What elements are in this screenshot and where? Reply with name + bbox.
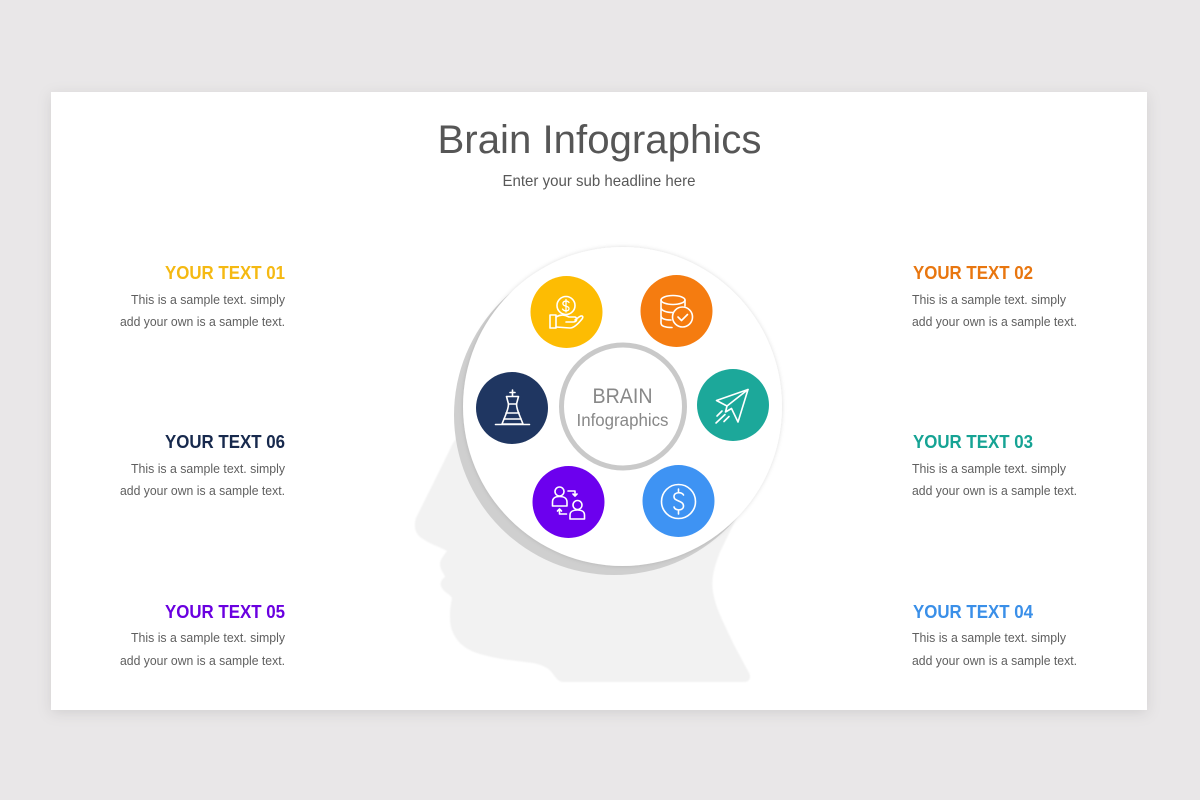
centre label: BRAIN [592, 385, 652, 408]
text block 01: This is a sample text. simply [131, 293, 286, 307]
text block 06 [120, 432, 286, 498]
icon: dollar coin (blue) [642, 465, 714, 537]
icon: paper plane (teal) [697, 369, 769, 441]
text block 06: YOUR TEXT 06 [165, 432, 285, 452]
text block 01 [120, 263, 286, 329]
text block 03: add your own is a sample text. [912, 484, 1077, 498]
centre label: Infographics [576, 410, 669, 430]
text block 05: YOUR TEXT 05 [165, 602, 285, 622]
icon: hand with coin (yellow) [530, 276, 602, 348]
text block 04: This is a sample text. simply [912, 631, 1067, 645]
icon: people exchange (purple) [532, 466, 604, 538]
icon: database check (orange) [640, 275, 712, 347]
text block 05: This is a sample text. simply [131, 631, 286, 645]
head silhouette [415, 420, 750, 682]
text block 05: add your own is a sample text. [120, 654, 285, 668]
grey back disc [454, 255, 774, 575]
text block 03 [912, 432, 1077, 498]
text block 01: add your own is a sample text. [120, 315, 285, 329]
white disc [463, 247, 782, 566]
text block 06: add your own is a sample text. [120, 484, 285, 498]
text block 04 [912, 602, 1077, 668]
text block 04: YOUR TEXT 04 [913, 602, 1033, 622]
text block 03: This is a sample text. simply [912, 462, 1067, 476]
text block 02: add your own is a sample text. [912, 315, 1077, 329]
text block 06: This is a sample text. simply [131, 462, 286, 476]
text block 02: This is a sample text. simply [912, 293, 1067, 307]
text block 03: YOUR TEXT 03 [913, 432, 1033, 452]
text block 02: YOUR TEXT 02 [913, 263, 1033, 283]
text block 02 [912, 263, 1077, 329]
title: Brain Infographics [438, 118, 762, 162]
text block 01: YOUR TEXT 01 [165, 263, 285, 283]
text block 05 [120, 602, 286, 668]
centre label [576, 385, 669, 430]
icon: chess king (navy) [476, 372, 548, 444]
subtitle: Enter your sub headline here [502, 173, 696, 190]
panel: white slide [51, 92, 1147, 710]
centre ring [562, 345, 684, 468]
text block 04: add your own is a sample text. [912, 654, 1077, 668]
